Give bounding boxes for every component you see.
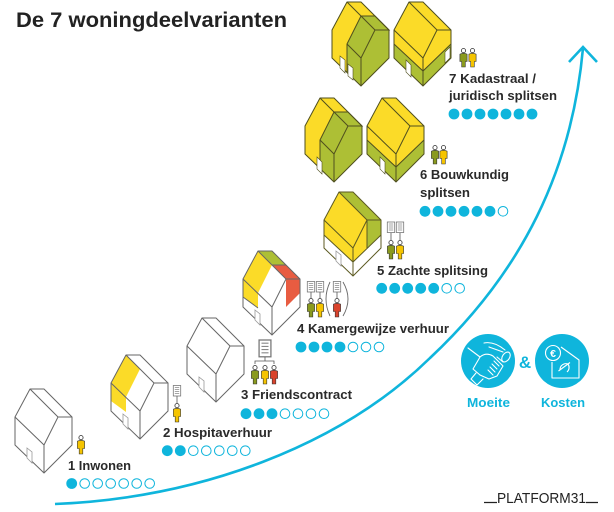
persons and contracts 4 xyxy=(307,282,348,317)
icon: moeite handshake xyxy=(461,334,515,388)
person and contract 2 xyxy=(173,386,181,422)
score 5 xyxy=(376,283,465,294)
label 4: 4 Kamergewijze verhuur xyxy=(297,322,449,336)
score 2 xyxy=(162,445,250,456)
persons and contracts 5 xyxy=(387,222,404,259)
title: De 7 woningdeelvarianten xyxy=(16,9,287,32)
label 2: 2 Hospitaverhuur xyxy=(163,426,272,440)
score 7 xyxy=(449,109,537,119)
house 4 xyxy=(243,251,300,335)
person 1 xyxy=(77,436,85,454)
label: moeite: Moeite xyxy=(467,395,510,410)
persons 7 xyxy=(460,48,476,67)
score 3 xyxy=(241,408,329,419)
persons and contract 3 xyxy=(251,340,278,384)
house 6 left xyxy=(305,98,362,182)
label: kosten: Kosten xyxy=(541,395,585,410)
score 1 xyxy=(66,478,154,489)
score 6 xyxy=(420,206,508,217)
house 6 right xyxy=(367,98,424,182)
house 7 left xyxy=(332,2,389,86)
logo: platform31: PLATFORM31 xyxy=(497,490,586,507)
icon: kosten house with euro: € xyxy=(550,348,556,360)
house 5 xyxy=(324,192,381,276)
ampersand: & xyxy=(519,353,531,372)
label 7 second line: juridisch splitsen xyxy=(448,89,557,103)
label 7: 7 Kadastraal / xyxy=(449,72,537,86)
growth arrow xyxy=(55,47,597,504)
label 5: 5 Zachte splitsing xyxy=(377,264,488,278)
house 3 xyxy=(187,318,244,402)
label 1: 1 Inwonen xyxy=(68,459,131,473)
persons 6 xyxy=(431,146,447,164)
house 2 xyxy=(111,355,168,439)
score 4 xyxy=(296,342,384,352)
label 3: 3 Friendscontract xyxy=(241,388,353,402)
house 7 right xyxy=(394,2,451,86)
house 1 xyxy=(15,389,72,473)
label 6 second line: splitsen xyxy=(420,186,470,200)
icon: kosten house with euro xyxy=(535,334,589,388)
label 6: 6 Bouwkundig xyxy=(420,168,509,182)
